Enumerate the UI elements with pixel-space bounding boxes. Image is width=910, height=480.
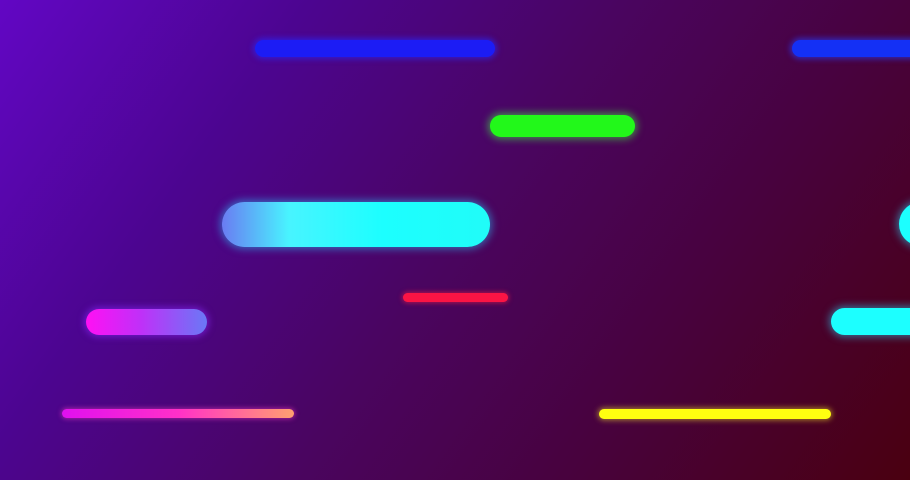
pill: magenta to blue	[86, 309, 207, 335]
pill: magenta to orange thin	[62, 409, 294, 418]
pill: cyan right	[831, 308, 910, 335]
pill: cyan large	[222, 202, 490, 247]
pill: cyan partial right	[899, 202, 910, 246]
pill: red thin	[403, 293, 508, 302]
pill: blue top right	[792, 40, 910, 57]
pill: yellow thin	[599, 409, 831, 419]
pill: blue top	[255, 40, 495, 57]
pill: green	[490, 115, 635, 137]
